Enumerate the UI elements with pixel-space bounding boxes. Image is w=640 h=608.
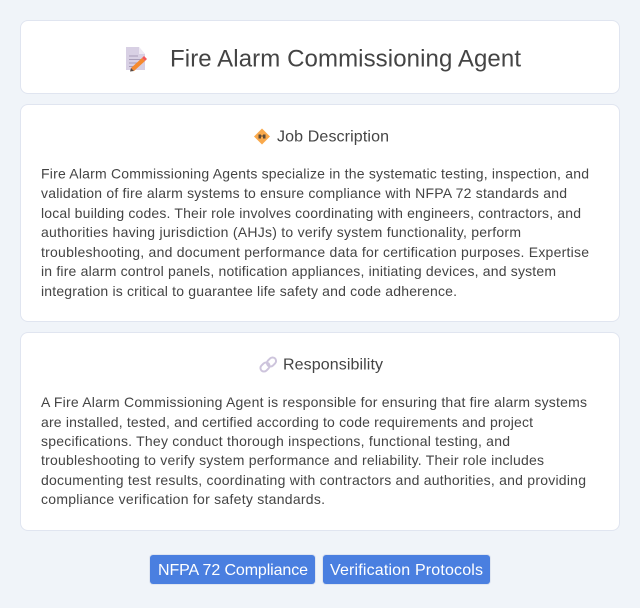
icon: chain link: [259, 356, 278, 373]
title: Fire Alarm Commissioning Agent: [170, 46, 521, 72]
text block: job description: [41, 166, 589, 299]
text block: responsibility: specifications. They conduct thorough inspections, functional testing, and: [41, 433, 510, 449]
panel: job description card: [20, 104, 620, 322]
panel: responsibility card: [20, 332, 620, 531]
text block: responsibility: troubleshooting to verify system performance and reliability. Their role includes: [41, 452, 544, 468]
text block: job description: authorities having jurisdiction (AHJs) to verify system functionality, perform: [41, 224, 521, 240]
text block: responsibility: compliance verification for safety standards.: [41, 491, 325, 507]
tag label: Verification Protocols: Verification Protocols: [330, 562, 483, 579]
text block: responsibility: [41, 394, 587, 507]
text block: responsibility: A Fire Alarm Commissioning Agent is responsible for ensuring that fire alarm systems: [41, 394, 587, 410]
heading: Responsibility: Responsibility: [283, 356, 383, 374]
text block: responsibility: documenting test results, coordinating with contractors and authorities, and providing: [41, 472, 586, 488]
text block: job description: troubleshooting, and document performance data for certification purposes. Expertise: [41, 244, 589, 260]
tag background: NFPA 72 Compliance: [150, 555, 315, 584]
heading: Job Description: Job Description: [277, 128, 389, 146]
text block: job description: validation of fire alarm systems to ensure compliance with NFPA 72 standards and: [41, 185, 567, 201]
text block: job description: local building codes. Their role involves coordinating with engineers, contractors, and: [41, 205, 581, 221]
text block: responsibility: are installed, tested, and certified according to code requirements and project: [41, 414, 533, 430]
icon: orange diamond: [254, 128, 270, 144]
text block: job description: Fire Alarm Commissioning Agents specialize in the systematic testing, inspection, and: [41, 166, 589, 182]
tag background: Verification Protocols: [323, 555, 490, 584]
tag label: NFPA 72 Compliance: NFPA 72 Compliance: [158, 562, 308, 579]
text block: job description: integration is critical to guarantee life safety and code adherence.: [41, 283, 457, 299]
text block: job description: in fire alarm control panels, notification appliances, initiating devices, and system: [41, 263, 556, 279]
panel: title card: [20, 20, 620, 94]
icon: document with pencil: [126, 47, 147, 72]
